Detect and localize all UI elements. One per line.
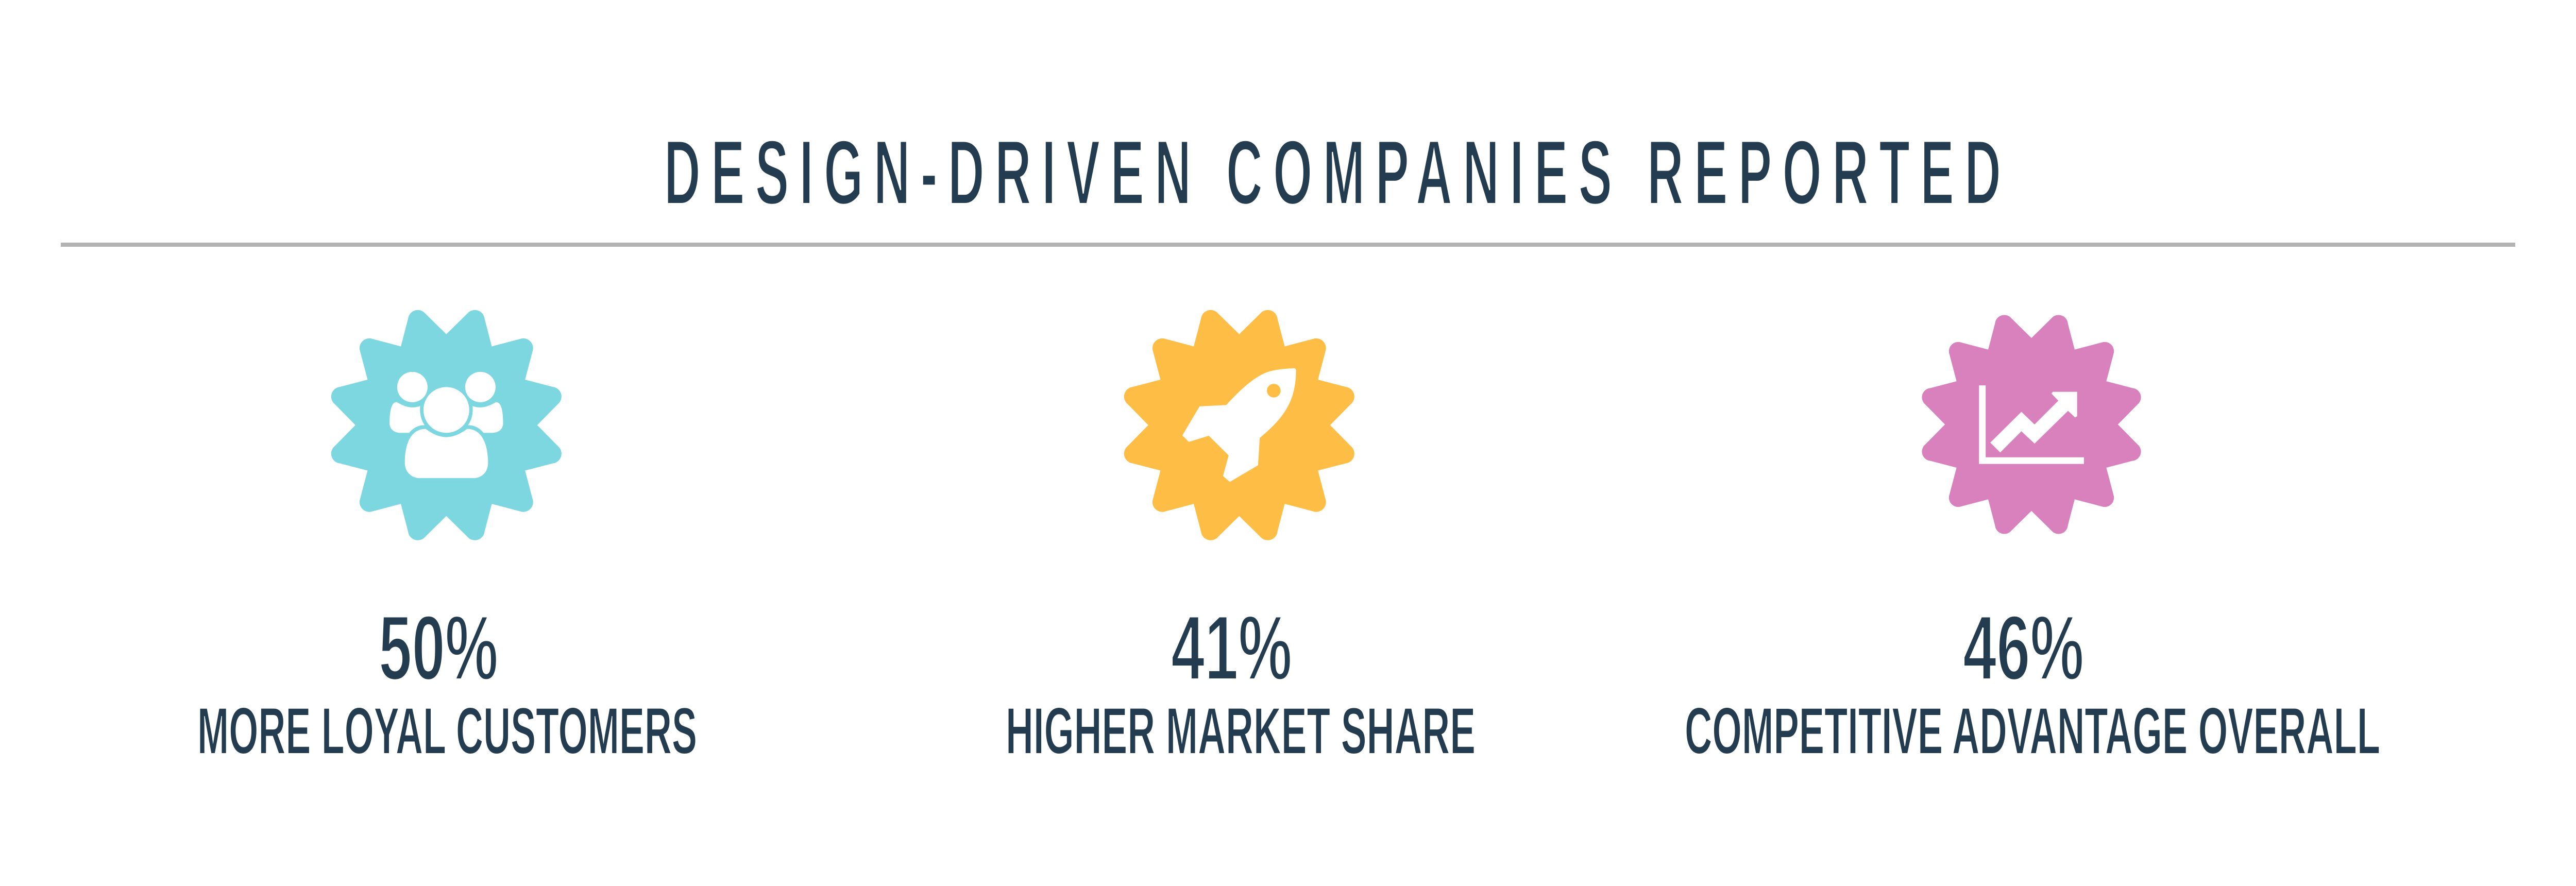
label: higher market share: HIGHER MARKET SHARE [1006,694,1476,768]
label: more loyal customers: MORE LOYAL CUSTOMERS [197,694,697,768]
panel: competitive advantage overall [1685,315,2380,768]
icon: rocket badge [1124,310,1354,540]
stat: 50%: 50% [379,597,498,699]
stat: 41%: 41% [1171,597,1292,699]
panel: higher market share [1006,310,1476,768]
icon: customers badge [331,310,562,540]
stat: 46%: 46% [1963,597,2084,699]
icon: growth chart badge [1922,315,2141,534]
title: DESIGN-DRIVEN COMPANIES REPORTED [664,122,2001,224]
panel: more loyal customers [197,310,697,768]
